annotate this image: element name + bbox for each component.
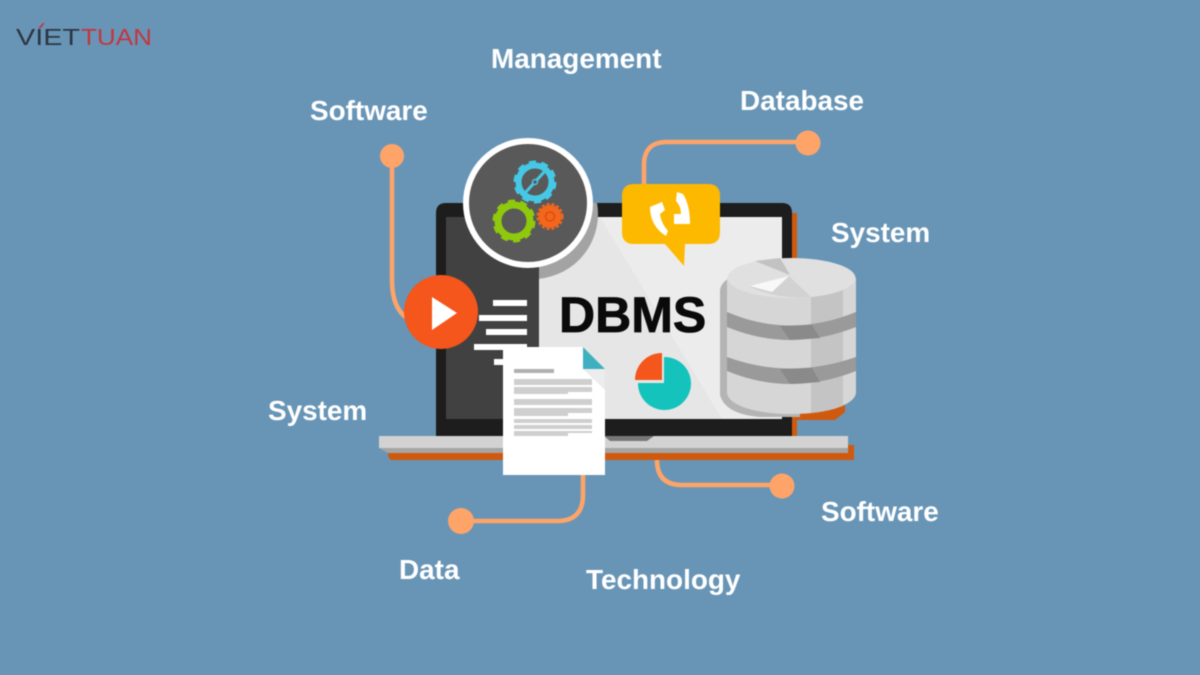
connector: Database <box>644 130 820 190</box>
label: System left: System <box>268 395 367 426</box>
label: System right: System <box>831 217 930 248</box>
label: Data: Data <box>399 554 460 585</box>
screen light panel <box>539 217 782 419</box>
laptop frame <box>436 203 792 436</box>
label: Software bottom: Software <box>821 496 939 527</box>
pie chart <box>635 353 691 410</box>
laptop <box>379 203 854 460</box>
laptop base <box>379 436 848 448</box>
icon: phone arrows <box>650 192 690 236</box>
label: Database: Database <box>740 85 864 116</box>
logo: Viet Tuan: VIET <box>16 24 80 50</box>
label: Software top: Software <box>310 95 428 126</box>
icon: green gear <box>494 202 534 240</box>
speech bubble <box>622 184 720 266</box>
icon: blue gear <box>516 162 554 202</box>
icon: orange gear <box>538 204 562 229</box>
play button <box>404 275 478 349</box>
connector: Software top left <box>380 144 407 318</box>
label: Technology: Technology <box>586 564 741 595</box>
database cylinder <box>720 258 856 420</box>
screen dark panel <box>446 217 539 419</box>
logo: Viet Tuan <box>16 22 152 50</box>
logo: Viet Tuan: TUAN <box>81 24 152 50</box>
gear badge <box>466 141 598 279</box>
DBMS heading: DBMS <box>559 287 706 343</box>
connector: Software bottom right <box>657 452 794 498</box>
menu lines <box>474 300 527 365</box>
connector: Data <box>448 470 583 534</box>
laptop orange shadow <box>388 213 854 460</box>
stacked discs <box>726 278 857 414</box>
document <box>503 347 605 475</box>
label: Management: Management <box>491 43 661 74</box>
